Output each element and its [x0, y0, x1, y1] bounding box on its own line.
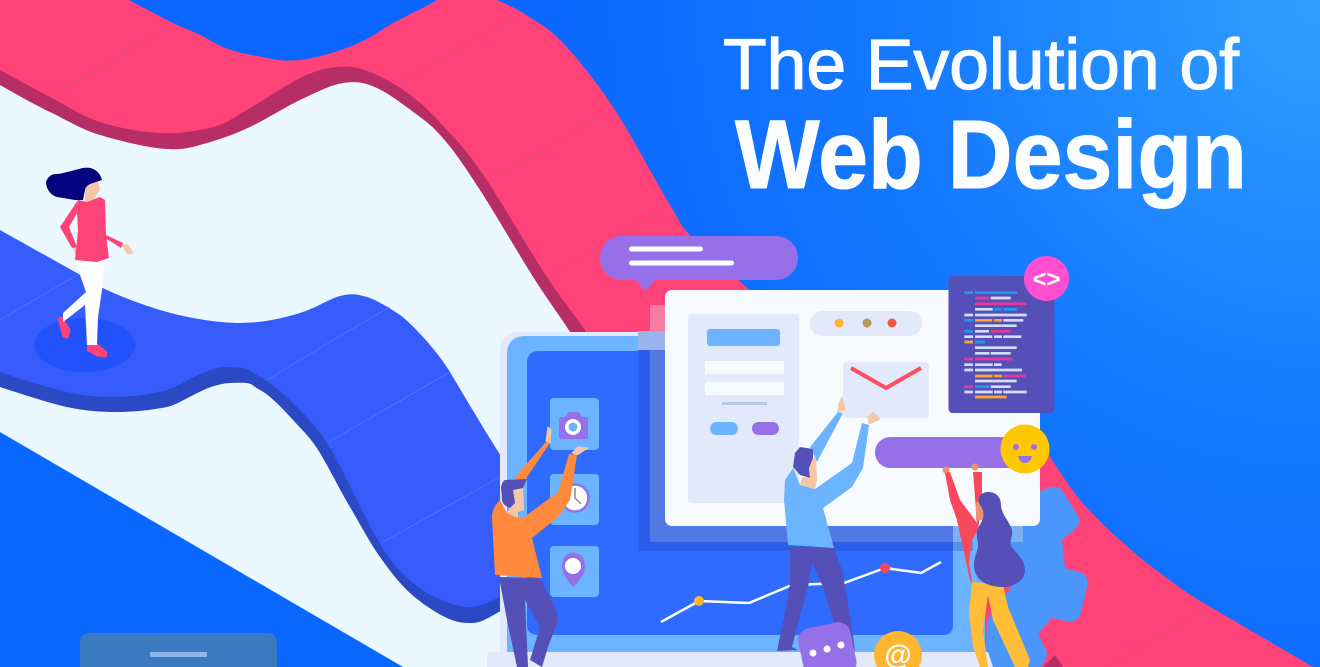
- code lines: [964, 293, 1027, 397]
- app icon: clock: [550, 474, 599, 525]
- blue gear: [985, 487, 1088, 667]
- dark rim of pink band: [0, 67, 585, 420]
- walkway shadow edge: [0, 367, 510, 667]
- envelope: [843, 362, 929, 418]
- browser window: [665, 290, 1040, 526]
- walkway seam lines: [0, 275, 500, 542]
- form panel: [688, 314, 799, 503]
- laptop: [487, 332, 993, 667]
- code tag badge: <>: [1032, 266, 1061, 293]
- man in orange shirt: [492, 427, 588, 667]
- three dots pill: [810, 311, 922, 336]
- app icon: location pin: [550, 546, 599, 597]
- browser window shadows: [638, 305, 1023, 551]
- man in blue shirt: [777, 397, 880, 651]
- purple search bar: [875, 437, 1025, 468]
- blue walkway: [0, 230, 510, 667]
- speech bubble: [600, 236, 798, 291]
- app icon: camera: [550, 398, 599, 450]
- white wave band: [0, 82, 610, 667]
- woman raising purple bar: [942, 464, 1030, 667]
- code panel: [948, 276, 1054, 413]
- title: The Evolution of: [723, 26, 1239, 105]
- lower blue triangle: [0, 432, 403, 667]
- at sign icon: [874, 631, 922, 667]
- line chart: [661, 562, 941, 622]
- bottom left panel: [80, 633, 277, 667]
- chat bubble icon: [796, 620, 859, 667]
- white band below walkway: [0, 383, 510, 667]
- title: Web Design: [735, 100, 1247, 209]
- code tag badge: [1024, 256, 1069, 301]
- woman walking figure: [34, 168, 135, 372]
- title: [723, 26, 1247, 209]
- smiley icon: [1000, 424, 1050, 474]
